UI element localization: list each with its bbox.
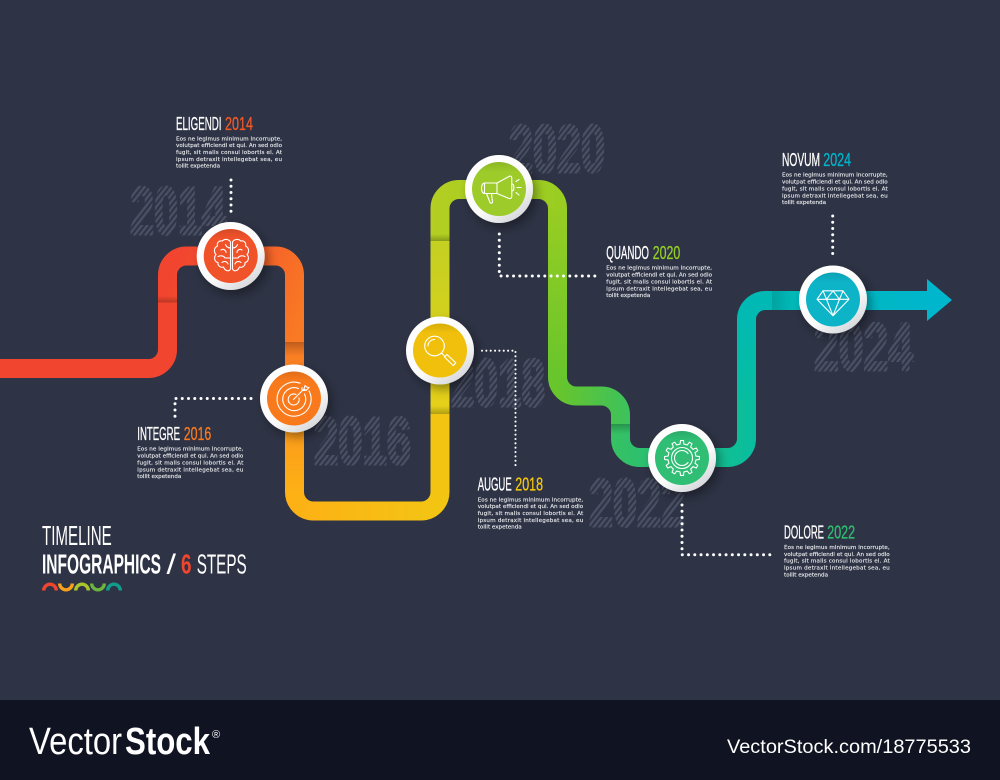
- text block: Integre 2016: volutpat efficiendi et qui. An sed odio: [137, 454, 244, 460]
- dotted connector 2020: [499, 234, 596, 276]
- title: TIMELINE: [42, 520, 112, 551]
- text block: Eligendi 2014: tollit expetenda: [176, 164, 220, 170]
- text block: Dolore 2022: DOLORE: [784, 522, 824, 542]
- footer logo: ®: [212, 729, 220, 741]
- text block: Novum 2024: ipsum detraxit intellegebat sea, eu: [782, 193, 888, 199]
- footer logo: Vector: [29, 721, 122, 763]
- text block: Integre 2016: 2016: [184, 424, 211, 444]
- text block: Dolore 2022: fugit, sit malis consul lobortis ei. At: [784, 559, 890, 565]
- ghost year 2020: 2020: [509, 112, 605, 187]
- footer logo: Stock: [125, 721, 211, 763]
- title: 6: [181, 548, 192, 579]
- text block: Quando 2020: [606, 243, 713, 299]
- node: brain 2014: [197, 222, 265, 290]
- icon: diamond: [817, 291, 849, 316]
- text block: Integre 2016: fugit, sit malis consul lobortis ei. At: [137, 460, 244, 466]
- text block: Integre 2016: ipsum detraxit intellegebat sea, eu: [137, 467, 244, 473]
- timeline road with arrow: [0, 190, 952, 511]
- text block: Quando 2020: 2020: [653, 243, 680, 263]
- title: [42, 520, 247, 579]
- text block: Eligendi 2014: [176, 114, 283, 170]
- text block: Novum 2024: 2024: [823, 150, 851, 170]
- text block: Integre 2016: [137, 424, 244, 480]
- text block: Eligendi 2014: ELIGENDI: [176, 114, 222, 134]
- ghost year 2016: 2016: [314, 404, 411, 479]
- text block: Integre 2016: INTEGRE: [137, 424, 180, 444]
- text block: Novum 2024: [782, 150, 888, 206]
- text block: Augue 2018: [478, 475, 584, 531]
- footer logo: [29, 721, 220, 763]
- node: gear 2022: [648, 424, 716, 492]
- title: /: [166, 548, 176, 579]
- node: target 2016: [260, 364, 328, 432]
- dotted connector 2016: [175, 398, 251, 417]
- text block: Dolore 2022: [784, 522, 890, 578]
- text block: Quando 2020: QUANDO: [606, 243, 649, 263]
- text block: Novum 2024: volutpat efficiendi et qui. An sed odio: [782, 180, 888, 186]
- ghost year 2024: 2024: [814, 310, 913, 385]
- footer band: [0, 700, 1000, 780]
- icon: brain: [214, 239, 249, 271]
- text block: Eligendi 2014: fugit, sit malis consul lobortis ei. At: [176, 150, 283, 156]
- text block: Dolore 2022: volutpat efficiendi et qui. An sed odio: [784, 552, 890, 558]
- title: STEPS: [197, 548, 247, 579]
- text block: Eligendi 2014: Eos ne legimus minimum incorrupte,: [176, 136, 282, 142]
- text block: Augue 2018: ipsum detraxit intellegebat sea, eu: [478, 518, 584, 524]
- text block: Dolore 2022: 2022: [827, 522, 855, 542]
- text block: Integre 2016: tollit expetenda: [137, 474, 181, 480]
- ghost year 2014: 2014: [130, 174, 226, 249]
- text block: Quando 2020: Eos ne legimus minimum incorrupte,: [606, 266, 712, 272]
- node: megaphone 2020: [465, 155, 533, 223]
- text block: Dolore 2022: tollit expetenda: [784, 572, 828, 578]
- icon: magnifying glass: [425, 336, 456, 366]
- text block: Augue 2018: AUGUE: [478, 475, 512, 495]
- text block: Eligendi 2014: ipsum detraxit intellegebat sea, eu: [176, 157, 282, 163]
- text block: Quando 2020: tollit expetenda: [606, 293, 650, 299]
- text block: Eligendi 2014: volutpat efficiendi et qui. An sed odio: [176, 143, 283, 149]
- text block: Novum 2024: tollit expetenda: [782, 200, 826, 206]
- text block: Novum 2024: Eos ne legimus minimum incorrupte,: [782, 173, 888, 179]
- text block: Novum 2024: NOVUM: [782, 150, 820, 170]
- text block: Augue 2018: tollit expetenda: [478, 525, 522, 531]
- dotted connector 2024: [831, 216, 834, 254]
- text block: Quando 2020: fugit, sit malis consul lobortis ei. At: [606, 279, 713, 285]
- node: magnifier 2018: [406, 316, 474, 384]
- icon: gear: [665, 441, 699, 475]
- text block: Eligendi 2014: 2014: [225, 114, 253, 134]
- icon: megaphone: [482, 176, 521, 203]
- text block: Augue 2018: volutpat efficiendi et qui. An sed odio: [478, 504, 584, 510]
- text block: Augue 2018: 2018: [515, 475, 543, 495]
- title wave ornament: [44, 584, 120, 590]
- dotted connector 2018: [482, 351, 516, 467]
- dotted connector 2014: [230, 180, 232, 213]
- text block: Dolore 2022: Eos ne legimus minimum incorrupte,: [784, 545, 890, 551]
- footer image id: VectorStock.com/18775533: [727, 736, 971, 758]
- text block: Augue 2018: Eos ne legimus minimum incorrupte,: [478, 497, 583, 503]
- text block: Quando 2020: volutpat efficiendi et qui. An sed odio: [606, 273, 713, 279]
- ghost year 2018: 2018: [451, 346, 545, 421]
- text block: Quando 2020: ipsum detraxit intellegebat sea, eu: [606, 286, 712, 292]
- node: diamond 2024: [799, 266, 867, 334]
- text block: Integre 2016: Eos ne legimus minimum incorrupte,: [137, 447, 244, 453]
- text block: Augue 2018: fugit, sit malis consul lobortis ei. At: [478, 511, 584, 517]
- ghost year 2022: 2022: [589, 466, 685, 541]
- title: INFOGRAPHICS: [42, 548, 161, 579]
- dotted connector 2022: [682, 505, 774, 555]
- text block: Dolore 2022: ipsum detraxit intellegebat sea, eu: [784, 566, 890, 572]
- text block: Novum 2024: fugit, sit malis consul lobortis ei. At: [782, 186, 888, 192]
- icon: target: [277, 382, 311, 416]
